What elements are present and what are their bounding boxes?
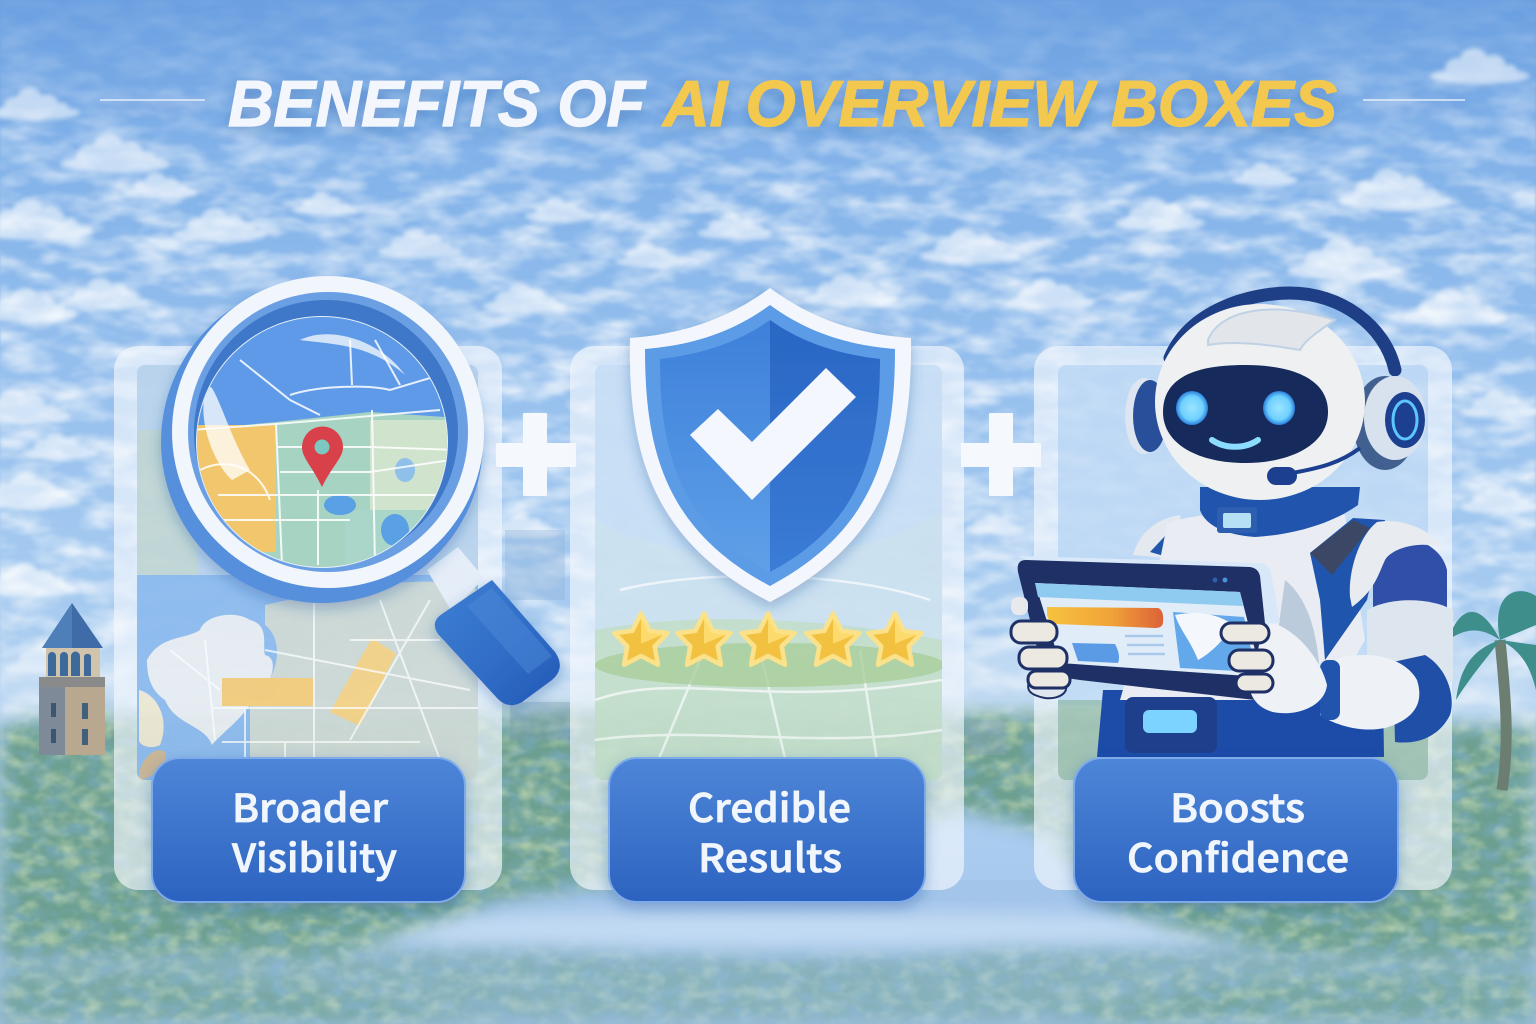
magnifier handle — [427, 547, 560, 705]
robot body — [1097, 487, 1453, 757]
tablet — [1018, 556, 1280, 700]
headset microphone — [1267, 448, 1360, 485]
five star rating — [614, 613, 922, 665]
label: boosts confidence — [1074, 758, 1398, 902]
title: BENEFITS OF — [228, 67, 647, 140]
illustration: robot — [1011, 293, 1453, 757]
label: boosts confidence: Confidence — [1127, 828, 1349, 884]
background: forest and water — [0, 698, 1536, 1024]
city skyline between panels — [505, 530, 1005, 755]
icon: red map pin — [302, 426, 343, 487]
label: credible results: Credible — [688, 778, 851, 834]
label: broader visibility: Broader — [232, 778, 389, 834]
map background — [595, 365, 945, 780]
robot shoulder and arm — [1310, 518, 1453, 743]
robot head — [1125, 293, 1426, 500]
title: AI OVERVIEW BOXES — [661, 67, 1337, 140]
map background — [137, 365, 478, 780]
label: boosts confidence: Boosts — [1170, 778, 1305, 834]
illustration: palm tree — [1448, 591, 1536, 790]
panel: boosts confidence — [1011, 293, 1453, 902]
plus sign 2 — [961, 413, 1041, 496]
label: credible results — [609, 758, 925, 902]
label: broader visibility: Visibility — [231, 828, 397, 884]
title — [100, 67, 1465, 140]
panel scene background — [1058, 365, 1428, 780]
panel: broader visibility — [114, 276, 560, 902]
label: broader visibility — [152, 758, 465, 902]
illustration: clock tower — [39, 603, 105, 755]
label: credible results: Results — [698, 828, 842, 884]
robot hands — [1011, 597, 1327, 713]
panel: credible results — [570, 288, 964, 902]
icon: magnifying glass — [161, 276, 560, 705]
plus sign 1 — [496, 413, 576, 496]
lens map — [197, 317, 447, 567]
icon: shield with check mark — [630, 288, 911, 602]
